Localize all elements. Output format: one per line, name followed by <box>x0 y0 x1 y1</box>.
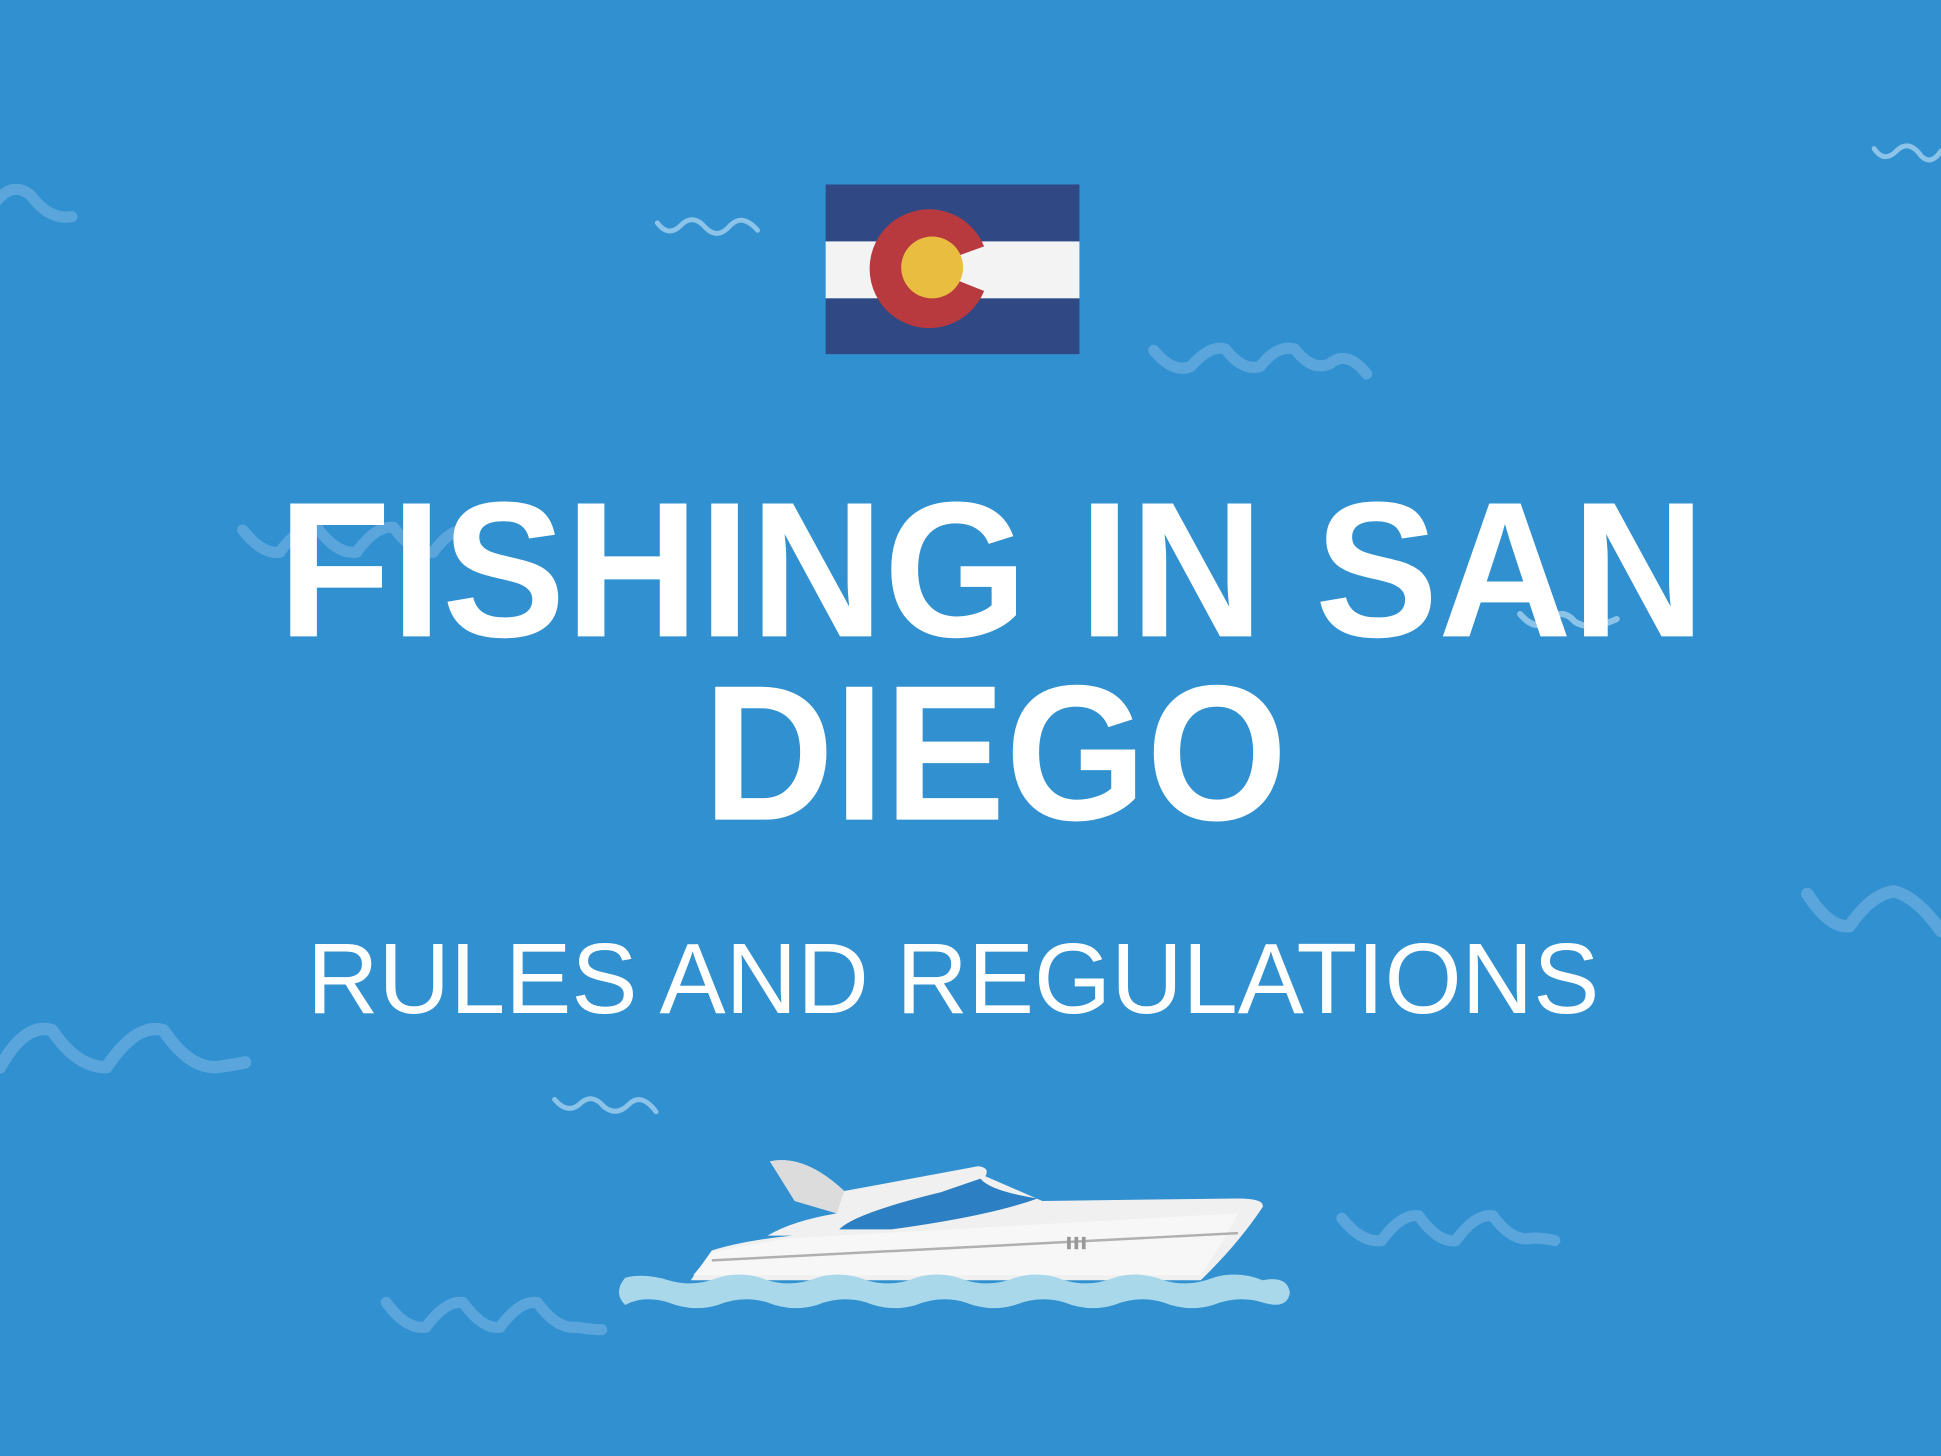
icon: colorado flag <box>826 184 1079 354</box>
subtitle: RULES AND REGULATIONS <box>307 923 1599 1035</box>
icon: boat <box>691 1160 1263 1280</box>
water under boat <box>619 1275 1290 1308</box>
title: DIEGO <box>703 645 1287 861</box>
title: FISHING IN SAN <box>278 461 1705 677</box>
title <box>278 461 1705 861</box>
